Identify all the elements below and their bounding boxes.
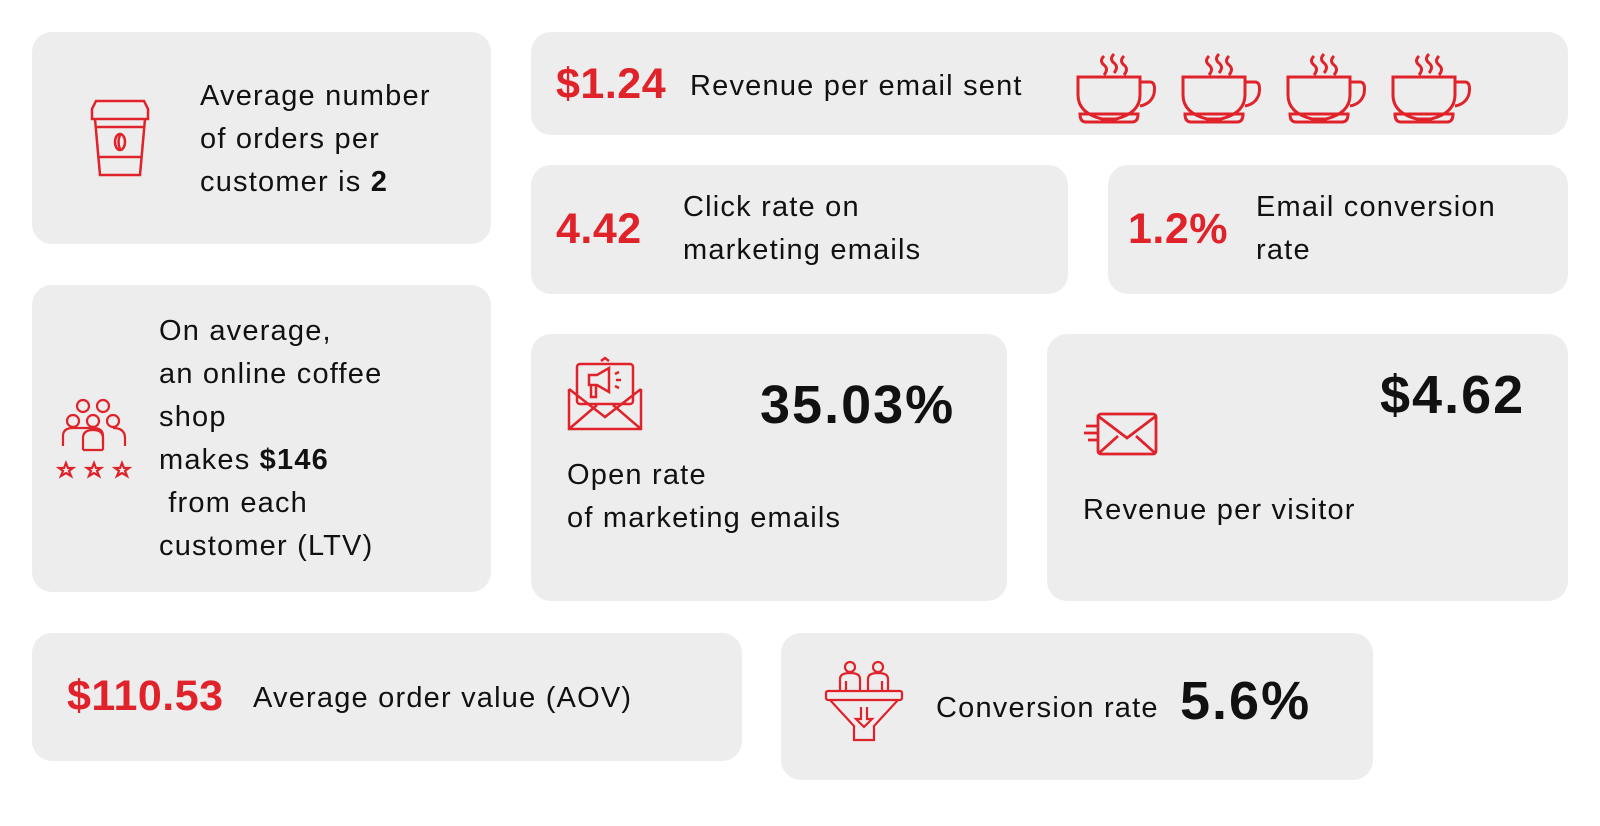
stat: 35.03%: 35.03% [760,375,955,435]
text: AOV: Average order value (AOV) [253,682,632,714]
text: orders: Average number [200,80,431,112]
text: LTV: On average, [159,315,332,347]
stat: $1.24: $1.24 [556,60,666,108]
text: LTV: from each [168,487,308,519]
text: open rate [567,459,841,534]
text: open rate: Open rate [567,459,707,491]
text: LTV: shop [159,401,227,433]
icon: coffee cup [90,100,150,176]
icon: email megaphone [568,356,642,430]
stat: $4.62: $4.62 [1380,365,1525,425]
icon: fast email [1084,412,1158,456]
icon: cups [1076,53,1471,124]
panel: orders per customer [32,32,491,244]
text: LTV: makes $146 [159,444,329,476]
text: email conversion: Email conversion [1256,191,1496,223]
stat: $110.53: $110.53 [67,672,224,720]
panel: LTV [32,285,491,592]
text: click rate: Click rate on [683,191,860,223]
text: orders [200,80,431,198]
panel: revenue per visitor [1047,334,1568,601]
stat: 5.6%: 5.6% [1180,671,1311,731]
text: open rate: of marketing emails [567,502,841,534]
text: LTV: an online coffee [159,358,382,390]
panel: open rate [531,334,1007,601]
text: LTV [159,315,382,562]
text: email conversion [1256,191,1496,266]
text: revenue per email: Revenue per email sent [690,70,1023,102]
panel: AOV [32,633,742,761]
panel: conversion rate [781,633,1373,780]
panel: revenue per email [531,32,1568,135]
panel: email conversion [1108,165,1568,294]
text: orders: customer is 2 [200,166,388,198]
stat: 1.2%: 1.2% [1128,205,1228,253]
text: click rate: marketing emails [683,234,921,266]
panel: click rate [531,165,1068,294]
text: email conversion: rate [1256,234,1311,266]
stat: 4.42: 4.42 [556,205,642,253]
icon: customers [56,398,132,479]
text: LTV: customer (LTV) [159,530,373,562]
text: revenue per visitor: Revenue per visitor [1083,494,1356,526]
text: orders: of orders per [200,123,380,155]
icon: funnel [824,660,904,742]
text: conversion rate: Conversion rate [936,692,1159,724]
text: click rate [683,191,921,266]
